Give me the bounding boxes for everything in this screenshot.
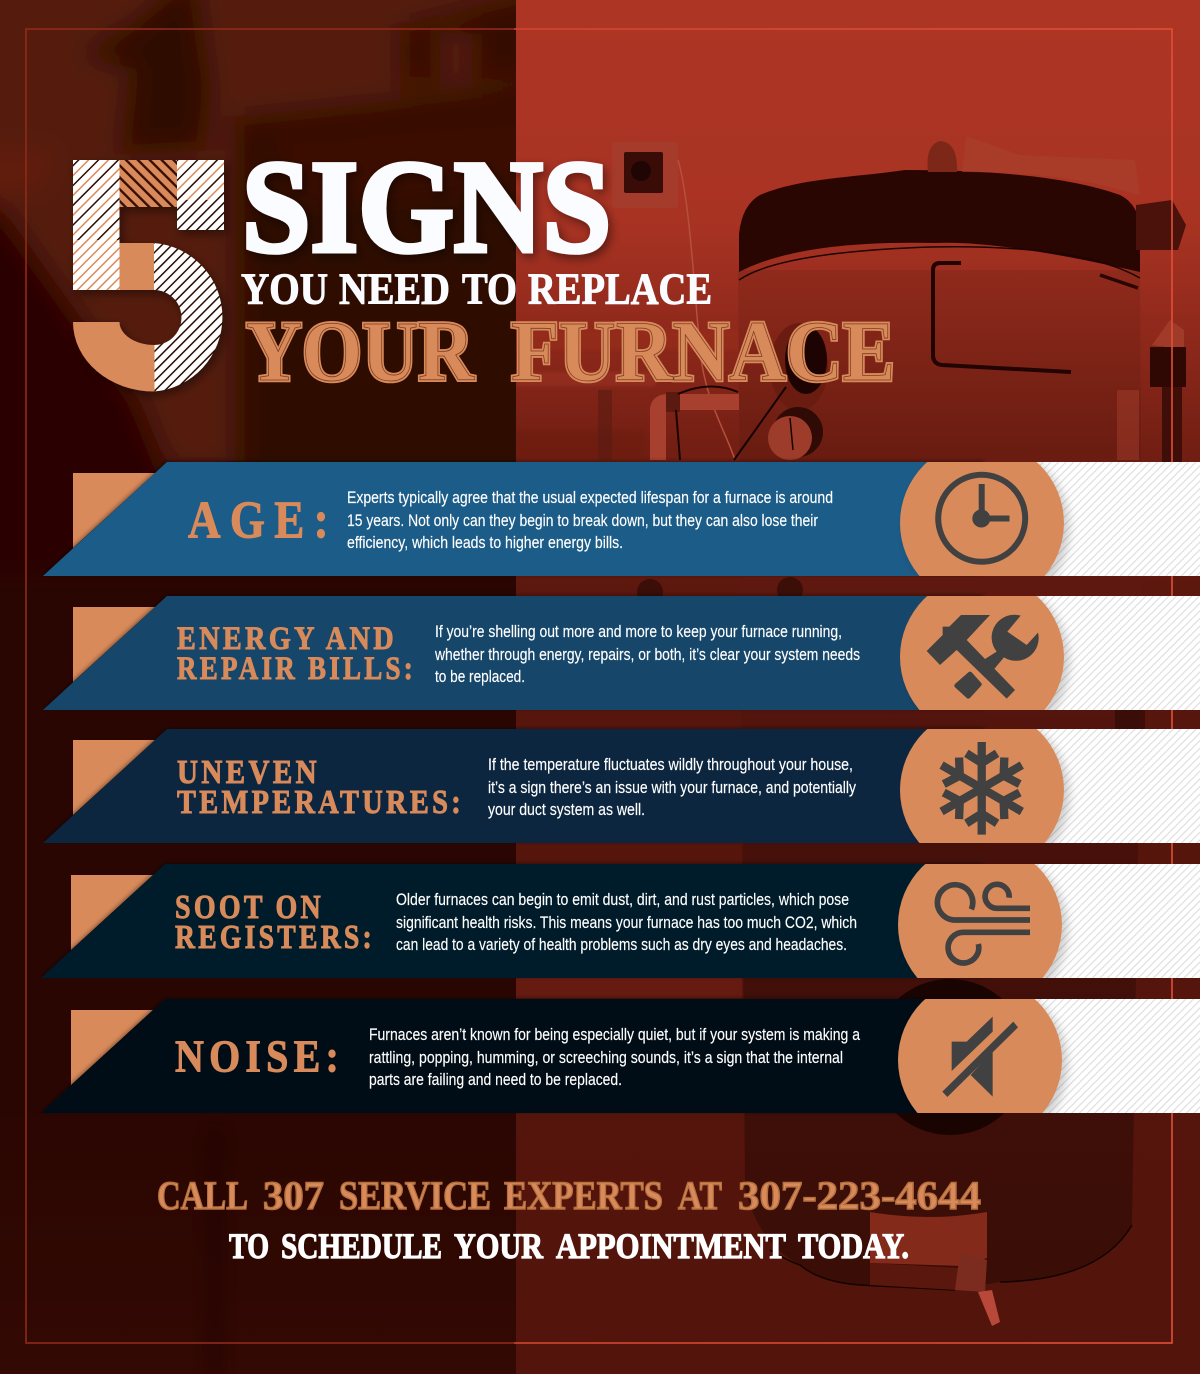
title: YOU NEED TO REPLACE: NEED (339, 264, 450, 314)
title: YOU NEED TO REPLACE: REPLACE (528, 264, 712, 314)
icon: muted speaker (898, 999, 1072, 1113)
socket (612, 142, 678, 208)
pipes (598, 386, 740, 460)
body text: soot: can lead to a variety of health problems such as dry eyes and headaches. (396, 935, 847, 954)
panel: uneven temperatures (43, 726, 1200, 844)
call to action: phone: EXPERTS (504, 1173, 663, 1218)
body text: age (347, 488, 833, 552)
title: YOUR FURNACE: FURNACE (511, 303, 895, 399)
panel: energy and repair bills (43, 594, 1200, 710)
body text: soot: Older furnaces can begin to emit dust, dirt, and rust particles, which pose (396, 890, 849, 909)
call to action: phone: AT (678, 1173, 722, 1218)
panel: age (43, 458, 1200, 576)
body text: age: 15 years. Not only can they begin to break down, but they can also lose their (347, 511, 818, 530)
call to action: schedule: TO (229, 1226, 269, 1266)
heading: noise: NOISE: (175, 1030, 344, 1082)
call to action: schedule: TODAY. (798, 1226, 909, 1266)
body text: energy: to be replaced. (435, 667, 525, 686)
body text: noise: parts are failing and need to be replaced. (369, 1070, 622, 1089)
call to action: schedule: SCHEDULE (281, 1226, 442, 1266)
paper on top (962, 136, 1140, 195)
call to action: phone: SERVICE (339, 1173, 491, 1218)
body text: temperatures: your duct system as well. (488, 800, 645, 819)
heading: uneven temperatures: TEMPERATURES: (177, 784, 464, 821)
body text: noise: Furnaces aren’t known for being especially quiet, but if your system is making a (369, 1025, 860, 1044)
title: YOUR FURNACE: FURNACE (511, 303, 895, 399)
body text: energy: If you’re shelling out more and more to keep your furnace running, (435, 622, 842, 641)
heading: soot on registers (175, 889, 375, 956)
body text: soot (396, 890, 857, 954)
title: YOU NEED TO REPLACE (241, 264, 712, 314)
heading: uneven temperatures: UNEVEN (177, 754, 320, 791)
panel: soot on registers (41, 862, 1200, 978)
body text: age: efficiency, which leads to higher energy bills. (347, 533, 623, 552)
call to action: schedule (229, 1226, 909, 1266)
title: YOUR FURNACE: YOUR (246, 303, 475, 399)
heading: energy and repair bills: REPAIR BILLS: (177, 651, 416, 687)
call to action: schedule: APPOINTMENT (556, 1226, 786, 1266)
call to action: phone: 307 (263, 1173, 324, 1218)
body text: energy (434, 622, 860, 686)
heading: age: AGE: (188, 492, 338, 550)
title: YOU NEED TO REPLACE: TO (462, 264, 517, 314)
heater top jacket (739, 170, 1140, 272)
call to action: phone: 307-223-4644 (738, 1173, 981, 1218)
big number 5 (73, 160, 224, 392)
body text: temperatures: If the temperature fluctuates wildly throughout your house, (488, 755, 853, 774)
call to action: phone: CALL (157, 1173, 248, 1218)
heater handle (933, 263, 1071, 372)
icon: wind (898, 864, 1072, 978)
heading: energy and repair bills (177, 621, 416, 687)
label and valve at bottom (870, 1212, 1000, 1326)
title: SIGNS: SIGNS (242, 133, 611, 280)
background: right red furnace photo (516, 0, 1200, 1374)
title: YOU NEED TO REPLACE: YOU (241, 264, 328, 314)
heater body (738, 270, 1142, 1290)
heading: soot on registers: SOOT ON (175, 889, 324, 926)
right pipes (1117, 200, 1186, 465)
body text: noise: rattling, popping, humming, or screeching sounds, it’s a sign that the internal (369, 1048, 843, 1067)
call to action: schedule: YOUR (454, 1226, 544, 1266)
body text: soot: significant health risks. This means your furnace has too much CO2, which (396, 913, 857, 932)
body text: noise (369, 1025, 860, 1089)
body text: temperatures (488, 755, 856, 819)
icon: snowflake (900, 729, 1074, 843)
icon: clock (900, 462, 1074, 576)
gauge (734, 387, 823, 460)
strips between ribbons (1115, 710, 1145, 729)
title: YOUR FURNACE (246, 303, 895, 399)
background: left dark blurred photo (0, 0, 516, 470)
heading: soot on registers: REGISTERS: (175, 919, 375, 956)
heading: energy and repair bills: ENERGY AND (177, 621, 397, 657)
heading: uneven temperatures (177, 754, 464, 821)
panel: noise (41, 996, 1200, 1114)
title: YOUR FURNACE: YOUR (246, 303, 475, 399)
icon: hammer and wrench (900, 596, 1074, 710)
body text: temperatures: it’s a sign there’s an issue with your furnace, and potentially (488, 778, 856, 797)
heater hole (770, 323, 828, 411)
call to action: phone (157, 1173, 981, 1218)
body text: energy: whether through energy, repairs, or both, it’s clear your system needs (434, 645, 860, 664)
body text: age: Experts typically agree that the usual expected lifespan for a furnace is around (347, 488, 833, 507)
